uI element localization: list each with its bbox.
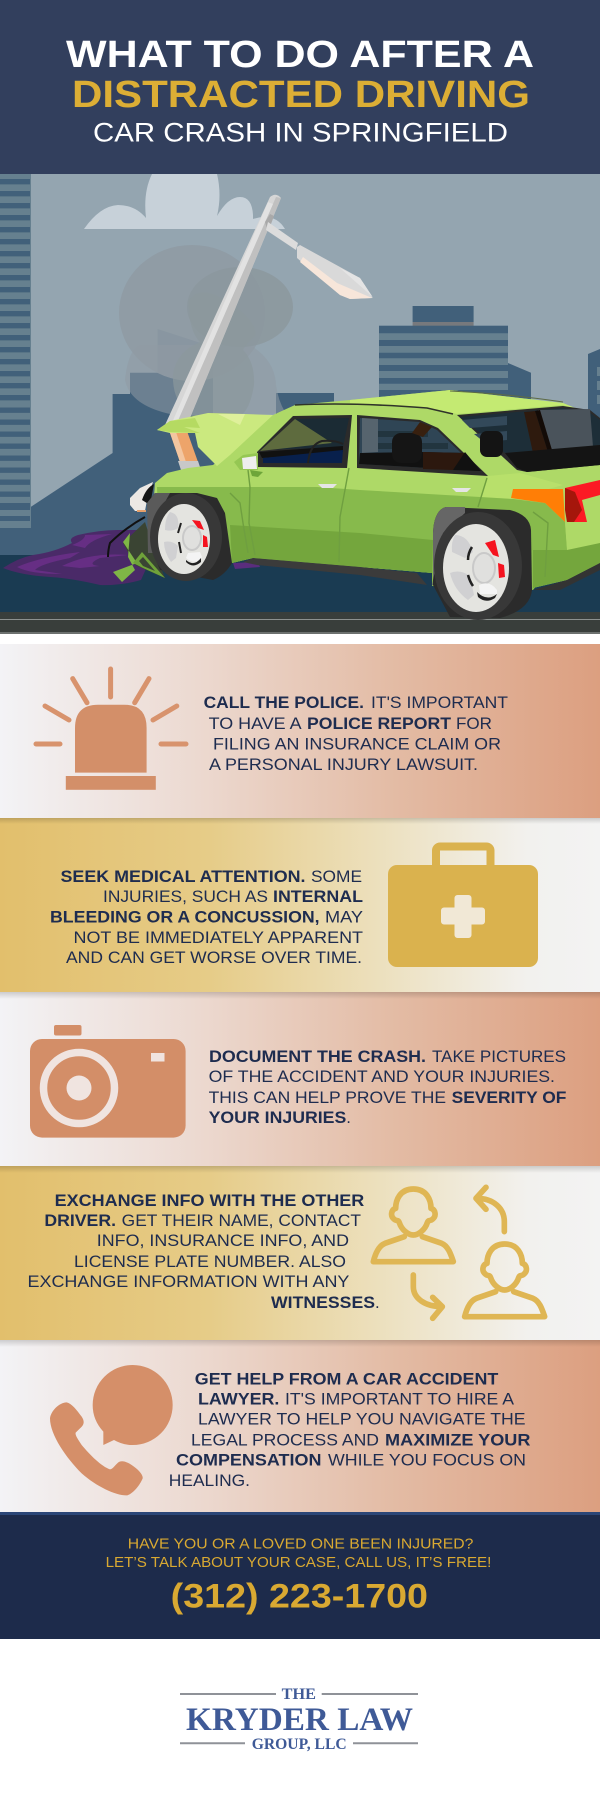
text: call the police: CALL THE POLICE. — [204, 693, 364, 712]
text: seek medical attention: MAY — [325, 908, 363, 926]
text: get help from a lawyer — [169, 1370, 530, 1490]
icon: two people exchanging — [373, 1187, 545, 1318]
icon: phone and speech bubble — [50, 1365, 173, 1495]
mirror — [234, 453, 263, 477]
text: exchange info: WITNESSES — [271, 1293, 375, 1312]
call to action text: HAVE YOU OR A LOVED ONE BEEN INJURED? — [128, 1536, 473, 1552]
logo: The Kryder Law Group, LLC — [180, 1686, 418, 1753]
text: get help from a lawyer: WHILE YOU FOCUS ON — [328, 1450, 526, 1470]
text: seek medical attention: SOME — [311, 867, 362, 886]
car — [108, 390, 600, 620]
text: exchange info: EXCHANGE INFORMATION WITH ANY — [28, 1272, 349, 1291]
windows — [257, 406, 600, 476]
title line 3: CAR CRASH IN SPRINGFIELD — [93, 118, 508, 148]
icon: siren — [36, 669, 186, 790]
call to action text line 2: LET’S TALK ABOUT YOUR CASE, CALL US, IT’S FREE! — [106, 1555, 491, 1571]
text: seek medical attention: SEEK MEDICAL ATTENTION. — [60, 867, 306, 886]
panel: call the police — [0, 644, 600, 818]
mid body tone — [157, 487, 567, 590]
logo: The Kryder Law Group, LLC: THE — [282, 1686, 316, 1703]
text: get help from a lawyer: GET HELP FROM A CAR ACCIDENT — [195, 1370, 499, 1388]
header panel — [0, 0, 600, 174]
road — [0, 555, 600, 634]
text: call the police: POLICE REPORT — [307, 714, 452, 733]
hood — [157, 413, 273, 466]
text: call the police — [204, 693, 508, 774]
text: exchange info: LICENSE PLATE NUMBER. ALSO — [74, 1252, 346, 1271]
text: get help from a lawyer: LAWYER. — [198, 1390, 279, 1408]
text: get help from a lawyer: HEALING. — [169, 1471, 250, 1490]
icon: camera — [30, 1025, 186, 1138]
text: exchange info: GET THEIR NAME, CONTACT — [122, 1211, 361, 1230]
text: document the crash: YOUR INJURIES — [209, 1108, 346, 1127]
front bumper damage — [108, 482, 165, 582]
panel: exchange info — [0, 1166, 600, 1340]
text: seek medical attention: BLEEDING OR A CONCUSSION, — [50, 908, 320, 926]
text: get help from a lawyer: LEGAL PROCESS AND — [191, 1430, 379, 1450]
phone number: (312) 223-1700 — [171, 1578, 428, 1616]
text: document the crash: . — [346, 1108, 351, 1127]
icon: first aid kit — [388, 846, 538, 967]
text: seek medical attention: INJURIES, SUCH AS — [103, 887, 268, 906]
text: call the police: TO HAVE A — [209, 714, 302, 733]
text: seek medical attention: INTERNAL — [273, 887, 363, 906]
cloud — [84, 174, 285, 229]
sill — [243, 558, 427, 585]
text: call the police: FOR — [456, 714, 492, 733]
title line 2: DISTRACTED DRIVING — [72, 74, 530, 116]
tail lights — [511, 480, 600, 522]
door seams and handles — [230, 468, 549, 550]
text: get help from a lawyer: COMPENSATION — [176, 1450, 322, 1470]
front wheel — [147, 493, 232, 581]
title line 1: WHAT TO DO AFTER A — [66, 34, 534, 76]
text: document the crash — [209, 1047, 566, 1127]
logo: The Kryder Law Group, LLC: GROUP, LLC — [252, 1736, 347, 1753]
illustration: crashed car against street lamp — [0, 174, 600, 634]
panel: seek medical attention — [0, 818, 600, 992]
rear wheel — [432, 507, 532, 620]
text: get help from a lawyer: LAWYER TO HELP YOU NAVIGATE THE — [198, 1410, 526, 1428]
text: seek medical attention: NOT BE IMMEDIATELY APPARENT — [74, 928, 363, 947]
text: document the crash: TAKE PICTURES — [432, 1047, 566, 1066]
text: exchange info: EXCHANGE INFO WITH THE OTHER — [55, 1191, 364, 1210]
oil puddle — [3, 530, 260, 585]
text: seek medical attention: AND CAN GET WORSE OVER TIME. — [66, 948, 362, 967]
logo: The Kryder Law Group, LLC: KRYDER LAW — [186, 1702, 413, 1738]
text: document the crash: THIS CAN HELP PROVE THE — [209, 1088, 446, 1107]
text: document the crash: DOCUMENT THE CRASH. — [209, 1047, 426, 1066]
text: document the crash: OF THE ACCIDENT AND YOUR INJURIES. — [209, 1067, 555, 1086]
text: exchange info: INFO, INSURANCE INFO, AND — [97, 1231, 349, 1250]
text: call the police: FILING AN INSURANCE CLAIM OR — [213, 734, 501, 754]
text: exchange info: DRIVER. — [44, 1211, 116, 1230]
car body — [150, 390, 600, 588]
text: exchange info: . — [375, 1293, 380, 1312]
street lamp — [165, 195, 373, 470]
call to action panel — [0, 1512, 600, 1639]
white gap — [0, 634, 600, 644]
text: call the police: IT'S IMPORTANT — [371, 693, 508, 712]
text: get help from a lawyer: IT'S IMPORTANT TO HIRE A — [285, 1390, 515, 1408]
text: document the crash: SEVERITY OF — [452, 1088, 566, 1107]
text: seek medical attention — [50, 867, 363, 967]
panel: get help from a lawyer — [0, 1340, 600, 1512]
text: exchange info — [28, 1191, 380, 1312]
city buildings — [0, 174, 600, 560]
smoke — [119, 245, 293, 418]
panel: document the crash — [0, 992, 600, 1166]
text: call the police: A PERSONAL INJURY LAWSUIT. — [209, 755, 478, 774]
text: get help from a lawyer: MAXIMIZE YOUR — [385, 1430, 530, 1450]
